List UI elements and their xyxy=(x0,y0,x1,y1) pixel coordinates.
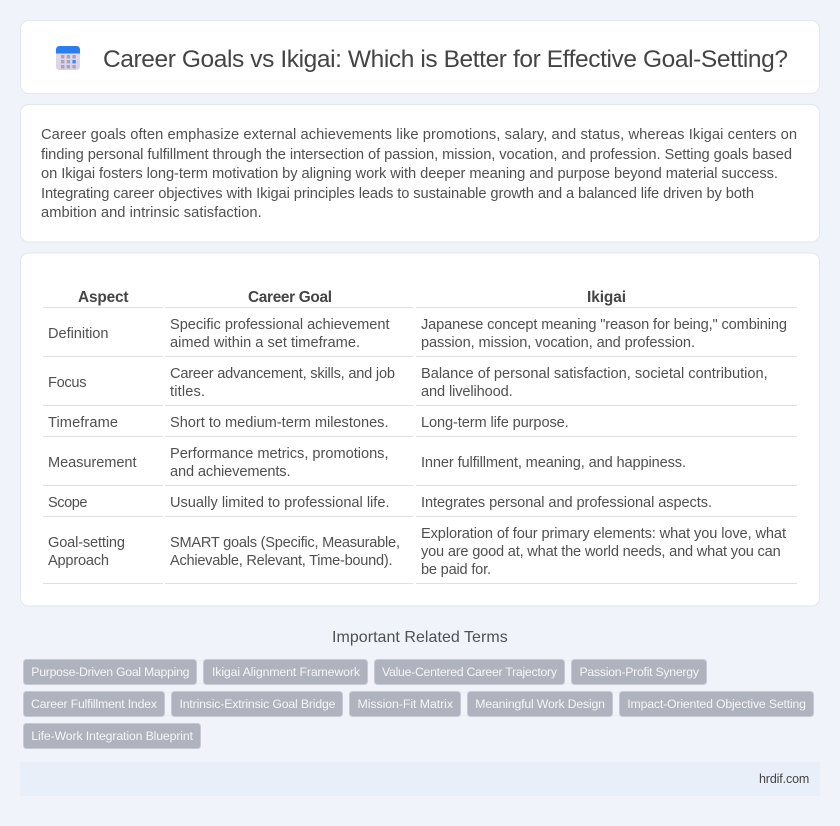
footer: hrdif.com xyxy=(759,772,809,786)
table header row: Career Goal xyxy=(248,289,332,306)
chip: ikigai alignment framework xyxy=(204,660,368,684)
table row: goal-setting approach: Approach xyxy=(48,553,109,569)
table header row: Ikigai xyxy=(587,289,626,306)
table row: goal-setting approach: SMART goals (Specific, Measurable, xyxy=(170,535,400,551)
table row: goal-setting approach: Exploration of four primary elements: what you love, what xyxy=(421,526,786,542)
heading: important related terms: Important Related Terms xyxy=(332,629,508,646)
text block: introduction paragraph: Integrating career objectives with Ikigai principles leads to sustainable growth and a balanced life driven by both xyxy=(41,186,754,202)
table header row xyxy=(43,289,797,308)
table row: focus xyxy=(43,366,797,406)
table row: goal-setting approach: be paid for. xyxy=(421,562,491,578)
table header row: Aspect xyxy=(78,289,128,306)
table row: scope xyxy=(43,495,797,517)
table row: measurement: Performance metrics, promotions, xyxy=(170,446,388,462)
text block: introduction paragraph: Career goals often emphasize external achievements like promotions, salary, and status, whereas Ikigai centers on xyxy=(41,127,797,143)
table row: timeframe: Long-term life purpose. xyxy=(421,415,569,431)
table row: scope: Integrates personal and professional aspects. xyxy=(421,495,712,511)
chip: intrinsic-extrinsic goal bridge: Intrinsic-Extrinsic Goal Bridge xyxy=(180,697,336,711)
footer xyxy=(20,762,820,796)
chip: value-centered career trajectory xyxy=(374,660,564,684)
table row: definition xyxy=(43,317,797,357)
chip: mission-fit matrix: Mission-Fit Matrix xyxy=(358,697,454,711)
table row: definition: Definition xyxy=(48,326,108,342)
chip: value-centered career trajectory: Value-Centered Career Trajectory xyxy=(382,665,558,679)
table row: timeframe: Short to medium-term milestones. xyxy=(170,415,388,431)
chip: intrinsic-extrinsic goal bridge xyxy=(172,692,342,716)
chip: meaningful work design: Meaningful Work Design xyxy=(475,697,605,711)
chip: career fulfillment index: Career Fulfillment Index xyxy=(31,697,158,711)
table row: focus: Focus xyxy=(48,375,86,391)
table row: focus: titles. xyxy=(170,384,205,400)
table row: measurement xyxy=(43,446,797,486)
chip: impact-oriented objective setting xyxy=(620,692,814,716)
table row: goal-setting approach: Goal-setting xyxy=(48,535,125,551)
table row: measurement: Measurement xyxy=(48,455,136,471)
table row: definition: Specific professional achievement xyxy=(170,317,390,333)
panel: header xyxy=(20,20,820,94)
table row: definition: aimed within a set timeframe. xyxy=(170,335,360,351)
chip: life-work integration blueprint xyxy=(24,724,200,748)
text block: introduction paragraph xyxy=(41,127,797,221)
title: Career Goals vs Ikigai: Which is Better for Effective Goal-Setting? xyxy=(103,46,788,73)
table row: definition: Japanese concept meaning "reason for being," combining xyxy=(421,317,787,333)
table row: measurement: and achievements. xyxy=(170,464,290,480)
table row: goal-setting approach: you are good at, what the world needs, and what you can xyxy=(421,544,781,560)
table row: focus: Balance of personal satisfaction, societal contribution, xyxy=(421,366,768,382)
table row: measurement: Inner fulfillment, meaning, and happiness. xyxy=(421,455,686,471)
chip: impact-oriented objective setting: Impact-Oriented Objective Setting xyxy=(627,697,806,711)
text block: introduction paragraph: ambition and intrinsic satisfaction. xyxy=(41,205,262,221)
table row: scope: Scope xyxy=(48,495,88,511)
chip: passion-profit synergy xyxy=(572,660,706,684)
table row: goal-setting approach: Achievable, Relevant, Time-bound). xyxy=(170,553,392,569)
panel: introduction xyxy=(20,104,820,242)
table row: focus: and livelihood. xyxy=(421,384,513,400)
chip: meaningful work design xyxy=(468,692,612,716)
table row: scope: Usually limited to professional life. xyxy=(170,495,390,511)
chip: life-work integration blueprint: Life-Work Integration Blueprint xyxy=(31,729,194,743)
icon: calendar xyxy=(56,46,80,70)
chip: mission-fit matrix xyxy=(350,692,460,716)
text block: introduction paragraph: finding personal fulfillment through the intersection of passion, mission, vocation, and profession. Setting goals based xyxy=(41,147,792,163)
chip: passion-profit synergy: Passion-Profit Synergy xyxy=(580,665,700,679)
table row: timeframe xyxy=(43,415,797,437)
chip: purpose-driven goal mapping xyxy=(24,660,196,684)
text block: introduction paragraph: on Ikigai fosters long-term motivation by aligning work with deeper meaning and purpose beyond material success. xyxy=(41,166,778,182)
panel: related term chips xyxy=(24,660,814,748)
table row: goal-setting approach xyxy=(43,526,797,584)
chip: career fulfillment index xyxy=(24,692,164,716)
chip: ikigai alignment framework: Ikigai Alignment Framework xyxy=(212,665,361,679)
table row: definition: passion, mission, vocation, and profession. xyxy=(421,335,695,351)
panel: comparison table xyxy=(20,253,820,606)
table row: focus: Career advancement, skills, and job xyxy=(170,366,395,382)
table row: timeframe: Timeframe xyxy=(48,415,118,431)
chip: purpose-driven goal mapping: Purpose-Driven Goal Mapping xyxy=(31,665,190,679)
